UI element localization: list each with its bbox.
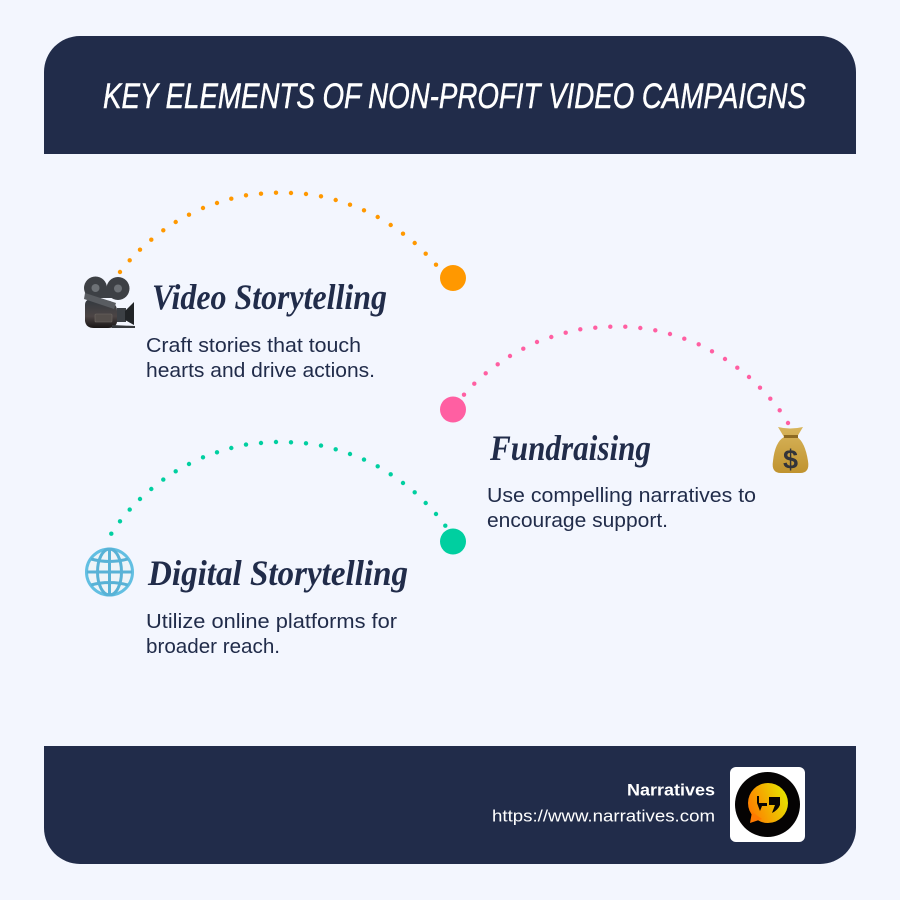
dotted arc: orange [118,190,438,274]
text block: Craft stories that touch [146,335,361,357]
panel: footer [44,746,856,864]
text block [146,335,375,382]
icon: money bag: $ [783,444,798,474]
icon: movie camera [84,276,135,328]
text block [487,485,756,532]
marker: green dot [440,528,466,554]
logo [730,767,805,842]
panel: header [44,36,856,154]
text block: encourage support. [487,510,668,532]
heading: Digital Storytelling [147,553,408,593]
panel: Video Storytelling [84,190,466,382]
text block: hearts and drive actions. [146,360,375,382]
icon: money bag [773,427,808,474]
text block [146,611,397,658]
marker: orange dot [440,265,466,291]
website url: https://www.narratives.com [492,806,715,826]
heading: Fundraising [489,428,651,468]
panel: Fundraising [440,324,808,532]
heading: Video Storytelling [152,277,387,317]
marker: pink dot [440,396,466,422]
text block: Use compelling narratives to [487,485,756,507]
text block: Utilize online platforms for [146,611,397,633]
icon: globe [86,549,132,595]
panel: Digital Storytelling [86,440,466,658]
dotted arc: pink [462,324,790,425]
dotted arc: green [109,440,447,536]
brand name: Narratives [627,782,715,800]
text block: broader reach. [146,636,280,658]
